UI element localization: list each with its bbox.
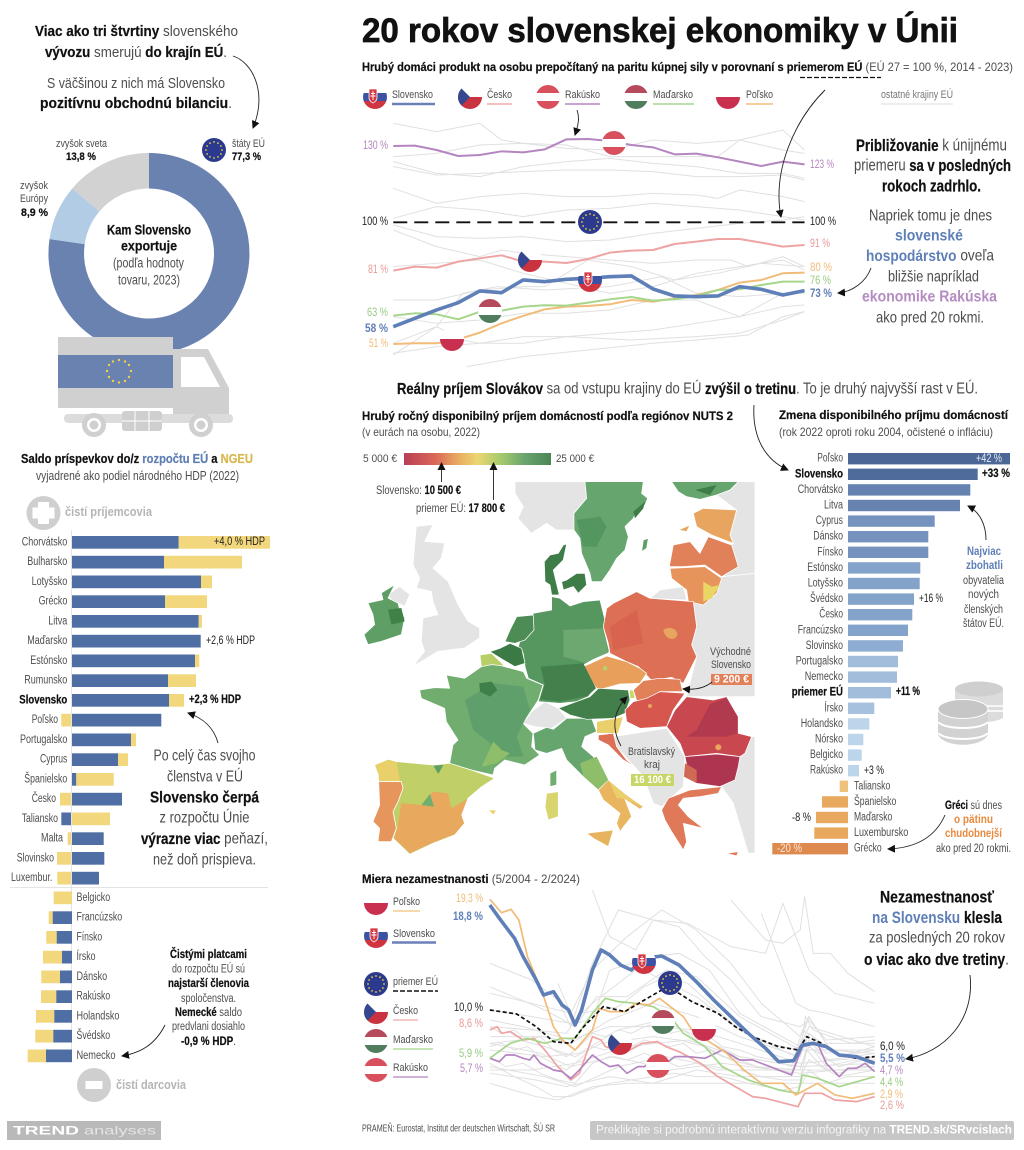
donut labels: štáty EÚ: [232, 137, 265, 150]
stacked bars: negative balance: Belgicko: [76, 892, 110, 904]
legend: unemployment: [364, 891, 438, 1082]
horizontal bar chart: Francúzsko: [798, 624, 843, 636]
legend: unemployment: Maďarsko: [393, 1034, 433, 1046]
icon: EU flag: [202, 138, 226, 162]
icon: truck: [58, 337, 233, 437]
horizontal bar chart: Litva: [824, 500, 843, 512]
stacked bars: positive balance: Španielsko: [24, 772, 67, 785]
horizontal bar chart: Nemecko: [805, 671, 843, 683]
stacked bars: positive balance: Estónsko: [30, 655, 67, 667]
horizontal bar chart: Estónsko: [807, 562, 843, 574]
stacked bars: positive balance: Bulharsko: [27, 556, 67, 568]
callout: new members richer: zbohatli: [966, 560, 1003, 572]
value labels: unemployment left: 18,8 %: [453, 911, 483, 923]
legend: colour scale: 25 000 €: [556, 453, 594, 465]
callout: convergence: bližšie napríklad: [888, 268, 979, 286]
legend: unemployment: priemer EÚ: [393, 975, 438, 988]
heading: income change: [779, 408, 1009, 439]
donut labels: zvyšok sveta: [56, 138, 108, 150]
Western Europe regions: [420, 597, 609, 787]
value labels: GDP right: 123 %: [810, 159, 834, 171]
donut labels: [20, 137, 265, 219]
legend: colour scale: 5 000 €: [363, 453, 397, 465]
Ireland: [364, 585, 405, 645]
horizontal bar chart: Portugalsko: [796, 656, 843, 668]
legend: countries: Slovensko: [392, 89, 433, 101]
arrow: to Slovakia value: [838, 268, 871, 293]
stacked bars: negative balance: Nemecko: [76, 1050, 116, 1062]
stacked bars: positive balance: Poľsko: [32, 714, 58, 726]
stacked bars: negative balance: [28, 892, 122, 1062]
headline: real income: Reálny príjem Slovákov sa od vstupu krajiny do EÚ zvýšil o tretinu. To je druhý najvyšší rast v EÚ.: [397, 378, 978, 398]
stacked bars: negative balance: Holandsko: [76, 1010, 120, 1022]
callout: net payers: [168, 948, 249, 1048]
arrow: to Slovakia bar: [188, 713, 218, 743]
value labels: GDP left: [362, 140, 388, 350]
horizontal bar chart: Slovinsko: [806, 640, 843, 652]
heading: income change: (rok 2022 oproti roku 2004, očistené o infláciu): [779, 425, 993, 439]
text: exports intro: vývozu smerujú do krajín EÚ.: [45, 43, 227, 61]
stacked bars: positive balance: [11, 536, 270, 884]
callout: new members richer: členských: [964, 604, 1003, 616]
arrow: from headline to Slovakia: [754, 405, 788, 470]
horizontal bar chart: -20 %: [777, 843, 802, 855]
value labels: unemployment left: 19,3 %: [456, 893, 483, 905]
arrow: to Germany: [122, 1025, 165, 1056]
value labels: unemployment left: [453, 893, 483, 1075]
arrow: to Slovakia unemployment: [906, 975, 971, 1059]
donut labels: 13,8 %: [66, 151, 96, 163]
heading: map: Hrubý ročný disponibilný príjem domácností podľa regiónov NUTS 2: [362, 409, 733, 423]
horizontal bar chart: +3 %: [864, 765, 884, 777]
value labels: GDP right: 73 %: [810, 288, 832, 300]
value labels: unemployment left: 5,7 %: [460, 1063, 483, 1075]
panel: GDP per capita chart: [362, 59, 1013, 367]
donut center label: exportuje: [121, 238, 177, 254]
donut labels: zvyšok: [20, 180, 48, 192]
value labels: GDP right: 91 %: [810, 238, 830, 250]
TREND logo: TREND: [13, 1124, 80, 1138]
horizontal bar chart: [772, 453, 1010, 855]
line chart: unemployment: [490, 890, 875, 1107]
legend: countries: Rakúsko: [565, 89, 600, 101]
callout: Eastern Slovakia: Východné: [710, 646, 751, 658]
arrow: to EU average line: [779, 90, 825, 217]
donut labels: 77,3 %: [232, 151, 261, 163]
callout: Slovakia draws more: členstva v EÚ: [167, 766, 243, 786]
Nordic and Baltic regions: [544, 482, 738, 605]
callout: net payers: predvlani dosiahlo: [172, 1021, 245, 1033]
callout: Slovakia draws more: výrazne viac peňazí,: [141, 830, 268, 848]
horizontal bar chart: Nórsko: [815, 734, 843, 746]
value labels: GDP left: 58 %: [365, 323, 388, 335]
donut labels: 8,9 %: [21, 207, 48, 219]
callout: Greeks poorer: [936, 800, 1011, 855]
value labels: unemployment left: 10,0 %: [454, 1002, 483, 1014]
legend: countries: [363, 85, 953, 109]
callout: convergence: [854, 136, 1011, 326]
horizontal bar chart: Švédsko: [810, 592, 843, 605]
stacked bars: positive balance: Maďarsko: [27, 635, 67, 647]
legend: colour scale: priemer EÚ: 17 800 €: [416, 502, 505, 515]
link banner: Preklikajte si podrobnú interaktívnu verziu infografiky na TREND.sk/SRvcislach: [596, 1124, 1012, 1136]
label: net recipients: čistí príjemcovia: [65, 505, 153, 519]
donut labels: Európy: [20, 193, 48, 205]
callout: Eastern Slovakia: [683, 646, 752, 689]
horizontal bar chart: Belgicko: [810, 749, 843, 761]
horizontal bar chart: priemer EÚ: [792, 686, 843, 699]
legend: colour scale: Slovensko: 10 500 €: [376, 485, 461, 497]
value labels: GDP left: 63 %: [367, 307, 388, 319]
arrow: to EU share: [233, 56, 259, 128]
panel: unemployment: [362, 872, 1009, 1112]
callout: net payers: Čistými platcami: [170, 948, 247, 961]
regional shades: [375, 485, 737, 853]
callout: convergence: ako pred 20 rokmi.: [876, 310, 984, 326]
title: 20 rokov slovenskej ekonomiky v Únii: [362, 10, 958, 50]
TREND logo: analyses: [84, 1124, 156, 1138]
value labels: GDP right: 80 %: [810, 262, 832, 274]
legend: countries: Česko: [487, 88, 512, 101]
legend: countries: Poľsko: [746, 89, 773, 101]
horizontal bar chart: Chorvátsko: [798, 484, 843, 496]
stacked bars: positive balance: Grécko: [39, 596, 67, 608]
heading: map: (v eurách na osobu, 2022): [362, 425, 480, 439]
value labels: GDP left: 100 %: [362, 216, 388, 228]
callout: unemployment fell: na Slovensku klesla: [872, 908, 1002, 926]
callout: Slovakia draws more: [141, 748, 268, 868]
stacked bars: positive balance: Česko: [32, 792, 56, 805]
non-EU land: [388, 482, 755, 853]
TREND logo: [7, 1121, 161, 1140]
horizontal bar chart: +42 %: [976, 453, 1002, 465]
callout: new members richer: štátov EÚ.: [963, 617, 1004, 630]
callout: net payers: do rozpočtu EÚ sú: [172, 962, 245, 976]
stacked bars: positive balance: +2,6 % HDP: [206, 635, 255, 647]
icon: minus: [77, 1068, 111, 1102]
callout: convergence: Približovanie k únijnému: [856, 136, 1007, 154]
legend: countries: ostatné krajiny EÚ: [881, 88, 953, 101]
link banner: [590, 1121, 1014, 1140]
value labels: unemployment right: [880, 1041, 905, 1112]
legend: unemployment: Poľsko: [393, 896, 420, 908]
value labels: GDP left: 81 %: [368, 264, 388, 276]
stacked bars: negative balance: Francúzsko: [76, 912, 122, 924]
legend: unemployment: Slovensko: [393, 928, 435, 940]
stacked bars: positive balance: Chorvátsko: [22, 536, 67, 548]
arrow: to Austria line: [575, 110, 578, 135]
stacked bars: positive balance: Luxembur.: [11, 872, 52, 884]
callout: Bratislava region: 16 100 €: [634, 774, 671, 786]
horizontal bar chart: Holandsko: [801, 718, 843, 730]
value labels: unemployment left: 5,9 %: [459, 1048, 483, 1060]
callout: net payers: Nemecké saldo: [175, 1007, 242, 1019]
callout: Slovakia draws more: Po celý čas svojho: [154, 748, 256, 764]
stacked bars: positive balance: Rumunsko: [24, 675, 67, 687]
donut chart: [48, 153, 249, 354]
text: exports intro: S väčšinou z nich má Slovensko: [47, 76, 225, 92]
text: exports intro: [35, 24, 238, 112]
stacked bars: positive balance: Taliansko: [22, 813, 58, 825]
text: exports intro: pozitívnu obchodnú bilanciu.: [40, 96, 232, 112]
callout: convergence: ekonomike Rakúska: [862, 288, 997, 306]
stacked bars: negative balance: Rakúsko: [76, 991, 110, 1003]
stacked bars: positive balance: Slovensko: [19, 694, 67, 706]
callout: Greeks poorer: chudobnejší: [945, 828, 1003, 840]
stacked bars: negative balance: Írsko: [76, 950, 96, 963]
callout: convergence: slovenské: [895, 228, 963, 244]
horizontal bar chart: +11 %: [896, 686, 920, 698]
legend: colour scale: [363, 453, 594, 515]
horizontal bar chart: Dánsko: [813, 531, 843, 543]
heading: map: [362, 409, 733, 439]
callout: unemployment fell: Nezamestnanosť: [880, 888, 995, 906]
subtitle: Hrubý domáci produkt na osobu prepočítaný na paritu kúpnej sily v porovnaní s priemerom EÚ (EÚ 27 = 100 %, 2014 - 2023): [362, 59, 1013, 74]
value labels: GDP left: 130 %: [363, 140, 388, 152]
callout: Greeks poorer: Gréci sú dnes: [945, 800, 1002, 812]
horizontal bar chart: Poľsko: [817, 453, 843, 465]
value labels: unemployment right: 6,0 %: [880, 1041, 905, 1053]
flags on unemployment chart: [608, 950, 716, 1078]
stacked bars: negative balance: Švédsko: [76, 1029, 110, 1042]
horizontal bar chart: Luxembursko: [854, 827, 908, 839]
horizontal bar chart: Španielsko: [854, 795, 896, 808]
callout: net payers: najstarší členovia: [168, 978, 249, 990]
callout: Greeks poorer: o pätinu: [954, 814, 993, 826]
stacked bars: positive balance: Slovinsko: [17, 852, 54, 864]
value labels: GDP right: [810, 159, 836, 300]
callout: net payers: spoločenstva.: [181, 993, 236, 1005]
stacked bars: positive balance: Lotyšsko: [32, 576, 67, 588]
callout: Slovakia draws more: z rozpočtu Únie: [160, 808, 250, 826]
callout: new members richer: obyvatelia: [963, 575, 1004, 587]
value labels: unemployment left: 8,6 %: [459, 1018, 483, 1030]
legend: unemployment: Rakúsko: [393, 1062, 428, 1074]
donut center label: Kam Slovensko: [107, 222, 191, 238]
donut center label: tovaru, 2023): [118, 272, 180, 288]
horizontal bar chart: Írsko: [824, 701, 843, 714]
callout: convergence: rokoch zadrhlo.: [882, 176, 981, 196]
value labels: unemployment right: 2,9 %: [880, 1089, 903, 1101]
value labels: GDP right: 100 %: [810, 216, 836, 228]
panel: income map: [362, 409, 755, 856]
Central and Eastern Europe regions: [558, 592, 752, 856]
horizontal bar chart: Maďarsko: [854, 812, 892, 824]
stacked bars: positive balance: Cyprus: [40, 754, 67, 766]
heading: budget: vyjadrené ako podiel národného HDP (2022): [36, 469, 239, 483]
donut center label: (podľa hodnoty: [113, 256, 184, 270]
panel: income change: [754, 405, 1011, 855]
panel: exports: [20, 24, 265, 437]
value labels: unemployment right: 5,5 %: [880, 1053, 905, 1065]
callout: Bratislava region: kraj: [644, 759, 660, 771]
horizontal bar chart: -8 %: [792, 812, 811, 824]
horizontal bar chart: Grécko: [854, 843, 882, 855]
callout: convergence: Napriek tomu je dnes: [869, 208, 992, 224]
value labels: GDP left: 51 %: [369, 338, 388, 350]
stacked bars: positive balance: Portugalsko: [20, 734, 67, 746]
callout: Bratislava region: Bratislavský: [628, 746, 675, 758]
callout: new members richer: [963, 546, 1004, 630]
heading: budget: Saldo príspevkov do/z rozpočtu EÚ a NGEU: [21, 451, 253, 466]
stacked bars: positive balance: Malta: [41, 833, 63, 845]
horizontal bar chart: +16 %: [919, 593, 943, 605]
callout: convergence: hospodárstvo oveľa: [866, 248, 994, 264]
callout: unemployment fell: [864, 888, 1009, 968]
callout: Eastern Slovakia: 9 200 €: [714, 674, 749, 686]
stacked bars: positive balance: +2,3 % HDP: [189, 694, 241, 706]
callout: Slovakia draws more: než doň prispieva.: [153, 852, 256, 868]
Southern Europe regions: [373, 717, 643, 854]
arrow: to Lithuania bar: [968, 506, 986, 540]
value labels: GDP right: 76 %: [810, 275, 831, 287]
stacked bars: positive balance: Litva: [48, 615, 68, 627]
horizontal bar chart: Lotyšsko: [808, 578, 843, 590]
flags on GDP chart: [440, 131, 626, 351]
callout: new members richer: Najviac: [967, 546, 1002, 558]
legend: unemployment: Česko: [393, 1004, 418, 1017]
stacked bars: negative balance: Fínsko: [76, 931, 102, 943]
label: net contributors: čistí darcovia: [116, 1078, 187, 1092]
callout: Eastern Slovakia: Slovensko: [711, 659, 751, 671]
stacked bars: negative balance: Dánsko: [76, 971, 107, 983]
value labels: unemployment right: 2,6 %: [880, 1100, 904, 1112]
donut center label: [107, 222, 191, 288]
heading: budget: [21, 451, 253, 483]
panel: EU budget balance: [10, 451, 270, 1102]
horizontal bar chart: Cyprus: [816, 515, 843, 527]
icon: plus: [26, 496, 60, 530]
stacked bars: positive balance: +4,0 % HDP: [214, 536, 265, 548]
horizontal bar chart: +33 %: [982, 468, 1010, 480]
heading: income change: Zmena disponibilného príjmu domácností: [779, 408, 1009, 422]
horizontal bar chart: Česko: [819, 608, 843, 621]
map of Europe: [364, 482, 755, 856]
horizontal bar chart: Fínsko: [817, 546, 843, 558]
value labels: unemployment right: 4,4 %: [880, 1077, 903, 1089]
line chart: GDP: [393, 123, 805, 367]
callout: new members richer: nových: [968, 589, 999, 601]
value labels: unemployment right: 4,7 %: [880, 1065, 903, 1077]
horizontal bar chart: Slovensko: [795, 468, 843, 480]
horizontal bar chart: Taliansko: [854, 780, 890, 792]
icon: coins: [938, 682, 1003, 745]
heading: unemployment: Miera nezamestnanosti (5/2004 - 2/2024): [362, 872, 580, 886]
legend: countries: Maďarsko: [653, 89, 693, 101]
callout: Bratislava region: [615, 697, 675, 786]
source note: PRAMEŇ: Eurostat, Institut der deutschen Wirtschaft, ŠÚ SR: [362, 1122, 555, 1134]
callout: Slovakia draws more: Slovensko čerpá: [150, 790, 259, 806]
horizontal bar chart: Rakúsko: [810, 765, 843, 777]
text: exports intro: Viac ako tri štvrtiny slovenského: [35, 24, 238, 40]
callout: net payers: -0,9 % HDP.: [181, 1036, 236, 1048]
arrow: to Greece: [888, 815, 945, 849]
